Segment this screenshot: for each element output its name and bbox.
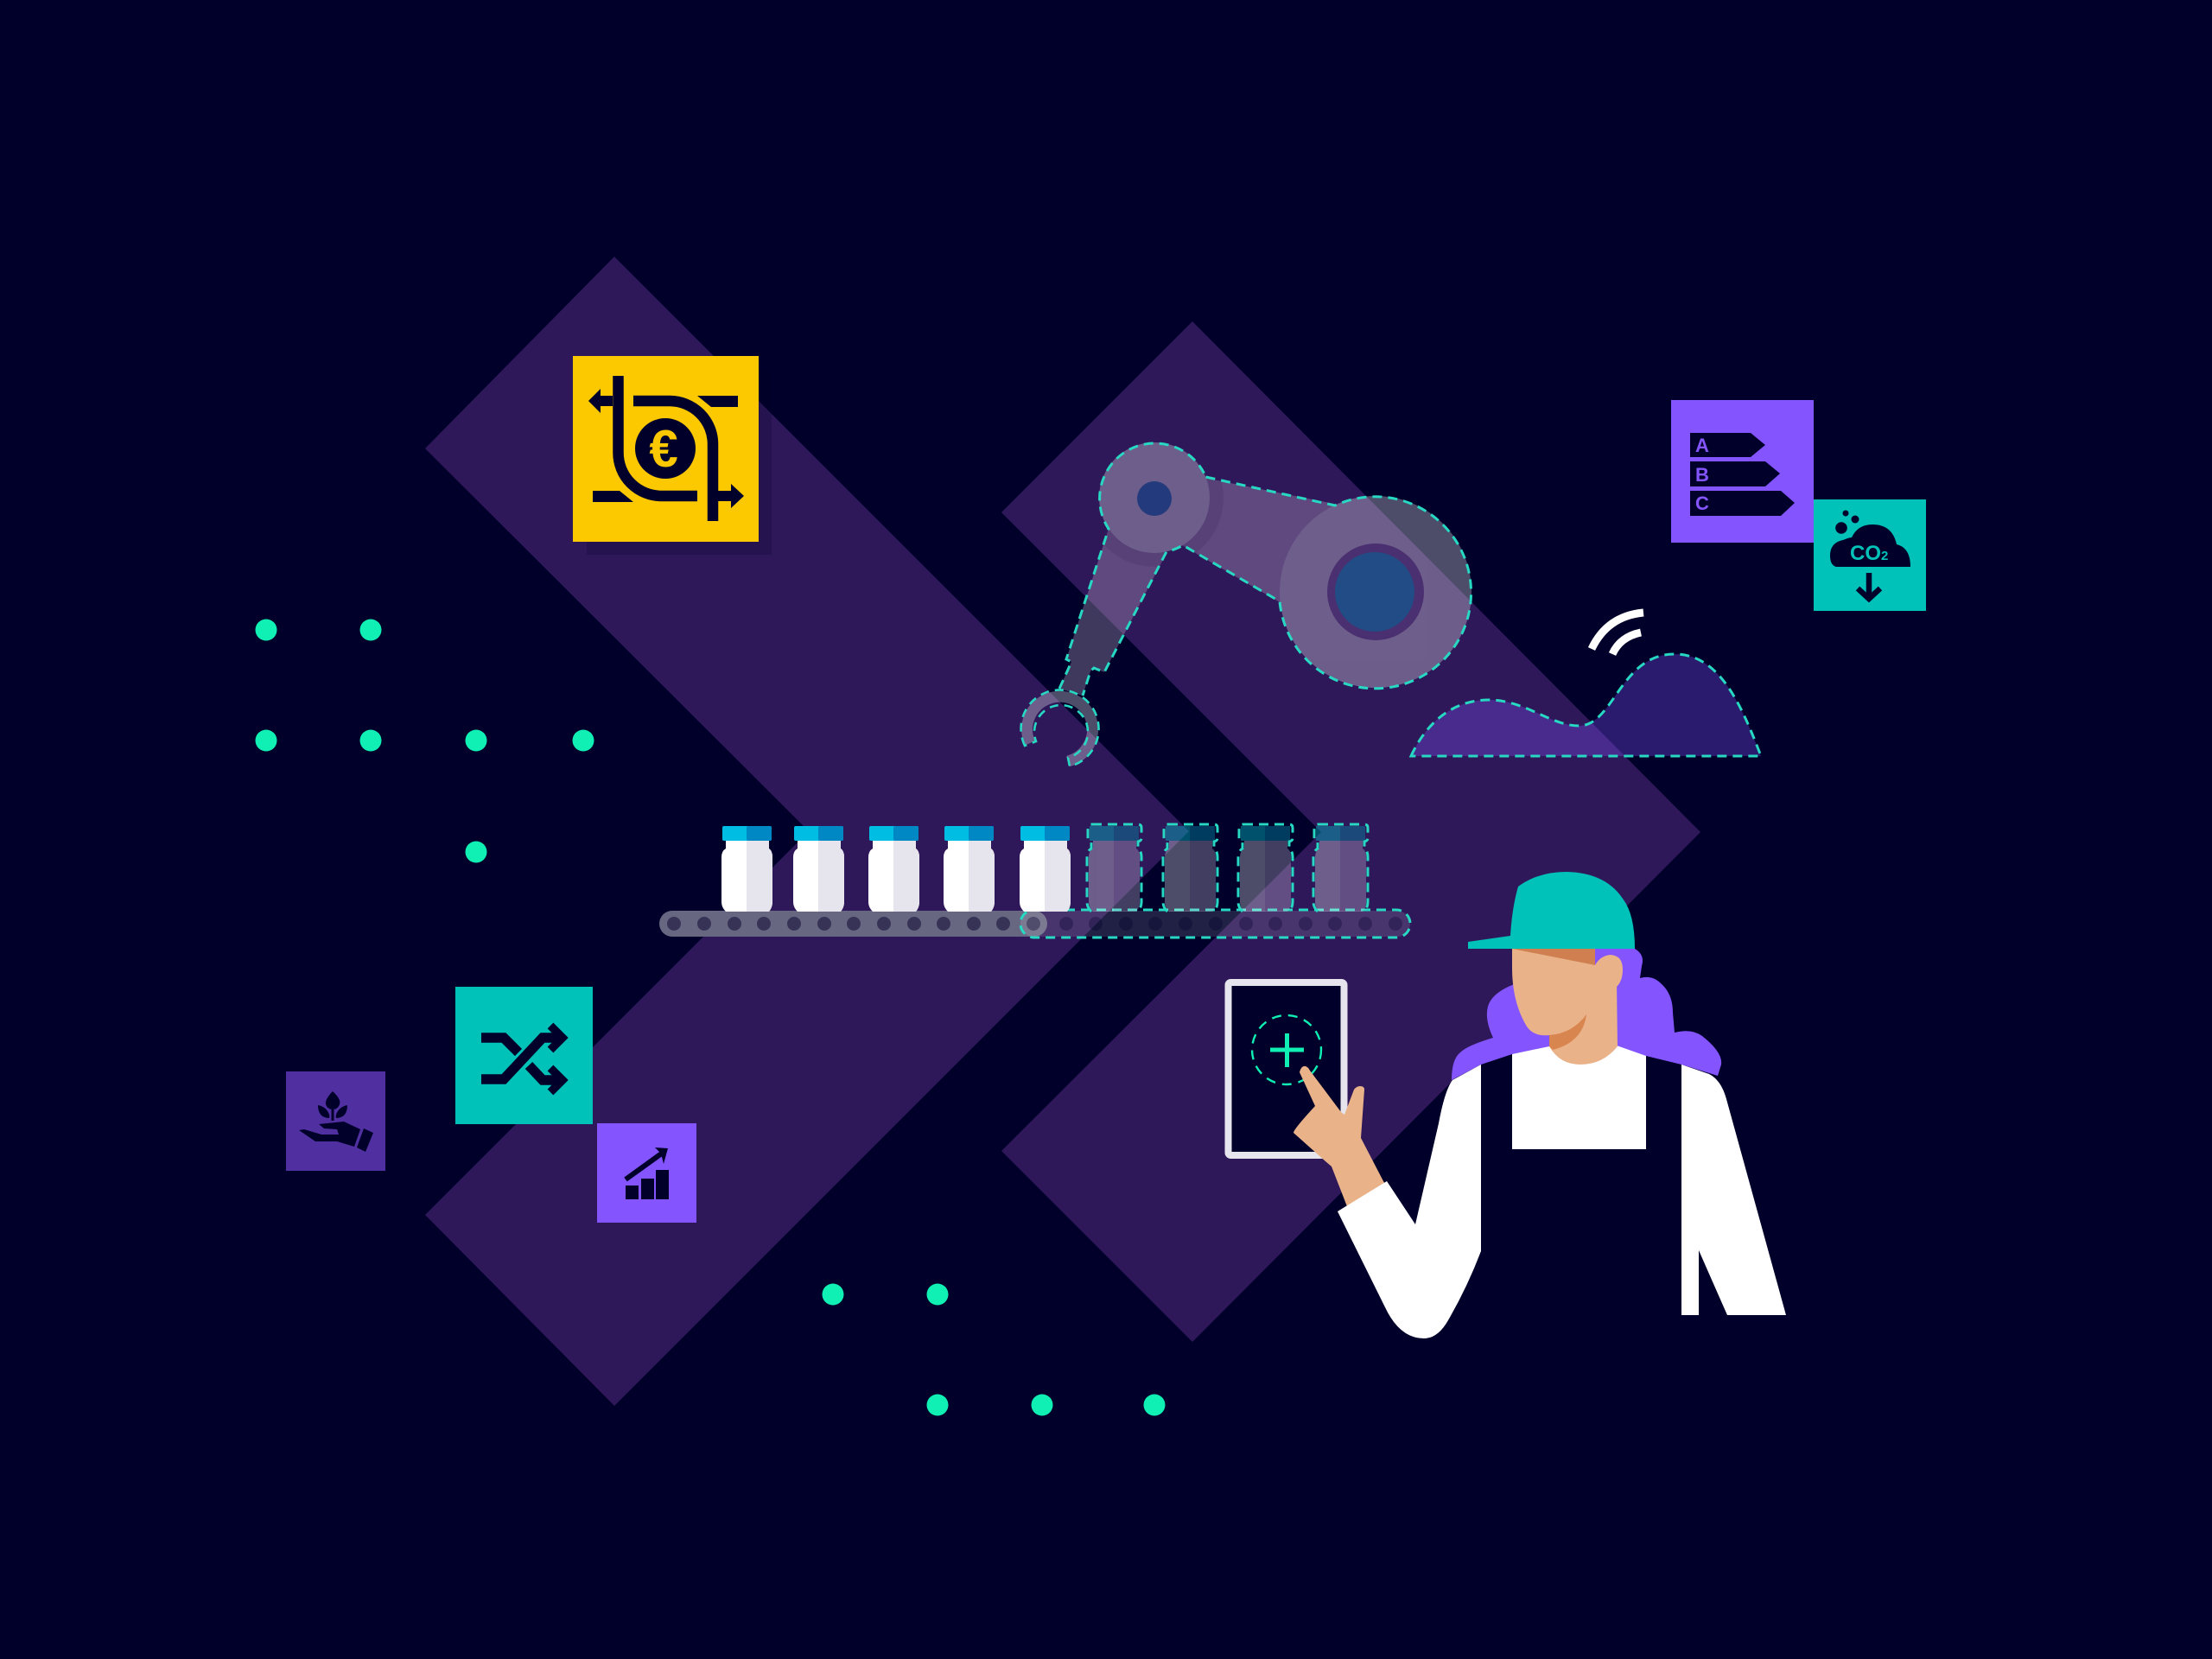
ghost bottle 1 — [1087, 824, 1141, 912]
violet square — [286, 1071, 385, 1171]
euro coin — [635, 418, 696, 479]
robot arm — [1021, 429, 1471, 766]
ghost bottle 4 — [1313, 824, 1368, 912]
ghost rollers — [1059, 917, 1402, 931]
tablet frame — [1229, 982, 1344, 1155]
bottle 2 — [793, 826, 844, 912]
dashed claw outline — [1021, 690, 1099, 766]
down arrow — [1858, 573, 1880, 599]
letter C: C — [1695, 493, 1709, 514]
icon: wifi signal — [1592, 613, 1643, 654]
arrow heads — [550, 1026, 563, 1092]
euro sign: € — [649, 420, 678, 478]
chevron: left — [425, 257, 1189, 1406]
teal square — [455, 987, 593, 1124]
chevron: right — [1001, 321, 1700, 1342]
tablet — [1229, 982, 1344, 1155]
shirt: right sleeve — [1681, 1065, 1786, 1315]
bottle 4 — [944, 826, 995, 912]
dashed arm outline — [1059, 443, 1471, 696]
cap — [1468, 872, 1635, 949]
crossing arrows — [619, 376, 713, 521]
joint: big hub — [1327, 543, 1424, 640]
icon: shuffle square — [455, 987, 593, 1124]
belt rollers — [667, 917, 1040, 931]
purple square — [1671, 400, 1814, 543]
hand — [299, 1122, 373, 1152]
square shadow — [587, 370, 772, 555]
cloud — [1830, 510, 1910, 567]
dashed touch circle — [1252, 1015, 1321, 1084]
cap shadow on face — [1512, 949, 1595, 965]
yellow square — [573, 356, 759, 542]
ghost bottle 2 — [1163, 824, 1217, 912]
purple square — [597, 1123, 696, 1223]
ear — [1595, 955, 1623, 987]
bottle 5 — [1020, 826, 1071, 912]
plant — [318, 1091, 347, 1121]
shirt: left sleeve — [1338, 1065, 1481, 1338]
CO2 text: CO2 — [1850, 542, 1888, 565]
dots: left cluster — [256, 619, 594, 862]
bottles: solid row — [721, 826, 1071, 912]
hair — [1452, 949, 1721, 1080]
neck shadow — [1549, 1014, 1586, 1050]
icon: growth chart square — [597, 1123, 696, 1223]
plus sign — [1270, 1033, 1304, 1067]
apron — [1481, 1054, 1681, 1322]
shuffle arrows — [481, 1038, 560, 1080]
icon: CO2 reduction square — [1814, 499, 1926, 611]
joint: small hub — [1137, 481, 1172, 516]
icon: hand with plant square — [286, 1071, 385, 1171]
dots: bottom cluster — [823, 1284, 1165, 1415]
conveyor: solid belt — [659, 911, 1047, 937]
growth arrow — [626, 1147, 668, 1179]
energy bars — [1690, 433, 1795, 516]
bottle 1 — [721, 826, 772, 912]
letter A: A — [1695, 435, 1709, 456]
ghost belt outline — [1020, 910, 1410, 938]
bottle 3 — [868, 826, 919, 912]
arrow heads and bars — [588, 389, 744, 508]
icon: yellow euro price square — [573, 356, 772, 555]
letter B: B — [1695, 464, 1709, 486]
worker figure — [1294, 872, 1786, 1338]
arm body — [1027, 429, 1471, 761]
hand and forearm — [1294, 1066, 1389, 1213]
bars — [626, 1170, 669, 1199]
bottles: ghost row — [1087, 824, 1368, 912]
conveyor: ghost belt — [1020, 910, 1410, 938]
ghost bottle 3 — [1238, 824, 1293, 912]
hills: ghost mound — [1411, 654, 1761, 756]
icon: energy label square — [1671, 400, 1814, 543]
teal square — [1814, 499, 1926, 611]
face and neck — [1512, 949, 1618, 1065]
shirt: chest — [1512, 1046, 1646, 1149]
